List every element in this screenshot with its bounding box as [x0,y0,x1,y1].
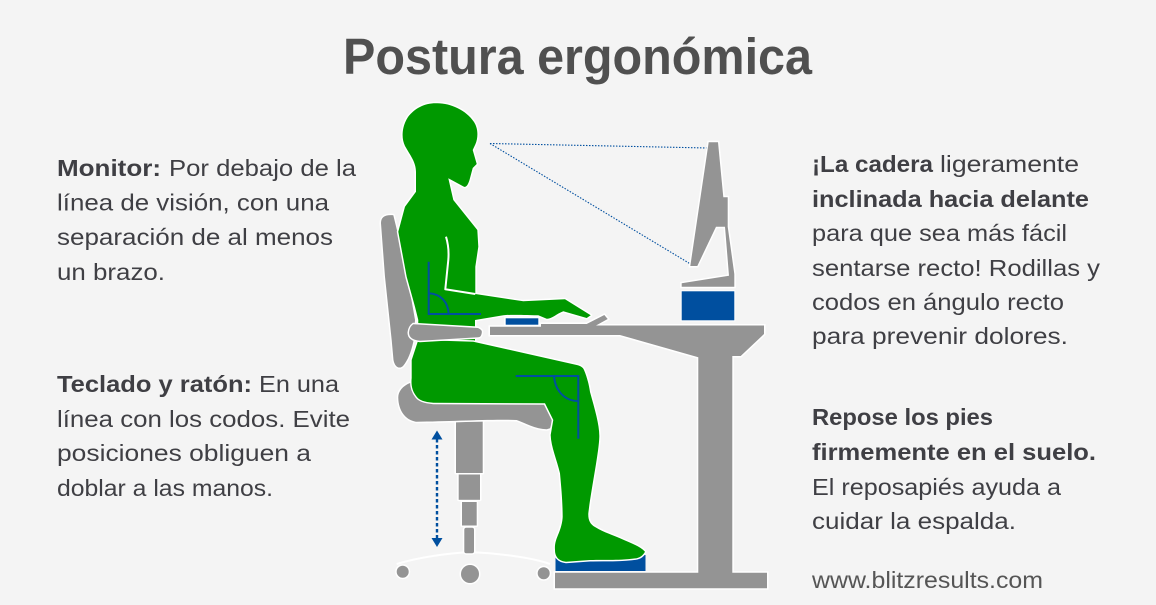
text block: feet: cuidar la espalda. [812,508,1016,534]
chair base [397,552,550,564]
text block: monitor: línea de visión, con una [57,190,329,216]
text block: monitor [57,155,356,285]
desk [490,315,767,588]
chair [381,215,553,583]
text block: keyboard and mouse [57,371,350,501]
text block: hip: inclinada hacia delante [812,186,1089,212]
text block: feet [812,404,1096,534]
text block: monitor: Monitor: [57,155,161,181]
text block: feet: El reposapiés ayuda a [812,474,1061,500]
arm gap [445,237,475,294]
chair seat [398,383,553,429]
text block: hip: para prevenir dolores. [812,323,1068,349]
chair backrest [381,215,415,368]
knee right angle [516,376,578,439]
text block: keyboard and mouse: Teclado y ratón: [57,371,252,397]
text block: feet: Repose los pies [812,404,993,430]
height adjustment arrow [432,430,442,547]
monitor riser [682,291,734,320]
text block: feet: firmemente en el suelo. [812,439,1096,465]
title: Postura ergonómica [343,28,813,85]
footrest [556,555,646,571]
text block: monitor: Por debajo de la [169,155,356,181]
elbow right angle [429,262,481,314]
text block: keyboard and mouse: doblar a las manos. [57,475,273,501]
person [398,103,645,562]
text block: keyboard and mouse: En una [259,371,339,397]
text block: hip: ¡La cadera [812,151,933,177]
armrest [409,324,482,341]
website url: www.blitzresults.com [811,567,1043,593]
text block: monitor: separación de al menos [57,224,333,250]
text block: hip: para que sea más fácil [812,220,1067,246]
text block: keyboard and mouse: línea con los codos. Evite [57,406,350,432]
text block: hip: ligeramente [940,151,1079,177]
text block: keyboard and mouse: posiciones obliguen a [57,440,311,466]
text block: hip: sentarse recto! Rodillas y [812,255,1101,281]
text block: hip [812,151,1101,349]
text block: hip: codos en ángulo recto [812,289,1064,315]
torso, head and arm [398,103,591,345]
chair wheels [397,565,550,583]
sight lines [490,144,708,264]
monitor [682,142,734,287]
mouse [506,318,538,325]
text block: monitor: un brazo. [57,259,165,285]
leg [411,340,645,562]
chair column [456,421,483,553]
